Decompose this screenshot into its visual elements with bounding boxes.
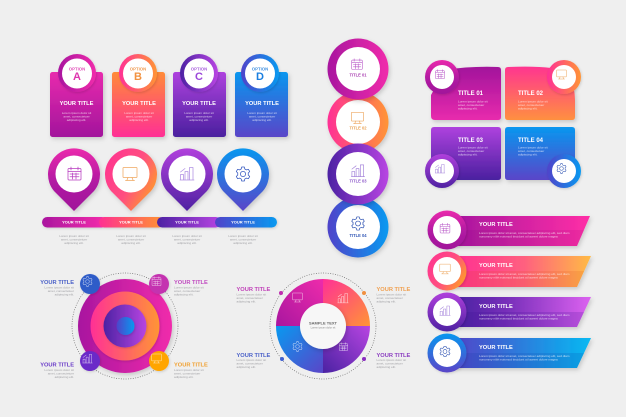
label top left: Lorem ipsum dolor sit xyxy=(44,286,74,290)
pin captions: amet, consectetuer xyxy=(118,238,144,242)
dotted ring xyxy=(72,273,178,379)
pin captions xyxy=(59,234,258,245)
pin captions: amet, consectetuer xyxy=(61,238,87,242)
label top right: YOUR TITLE xyxy=(376,287,411,293)
panel: option cards xyxy=(50,54,288,137)
pin B with monitor icon xyxy=(105,148,157,211)
option card D: amet, consectetuer xyxy=(249,114,275,118)
option card A: A xyxy=(73,71,81,83)
banner 3: YOUR TITLE xyxy=(479,304,513,310)
banner 1: nonummy nibh euismod tincidunt ut laoreet dolore magna xyxy=(479,234,558,238)
pin captions: Lorem ipsum dolor sit xyxy=(172,234,202,238)
option card B: B xyxy=(134,71,142,83)
label bottom right: YOUR TITLE xyxy=(174,362,208,368)
pin captions: adipiscing elit. xyxy=(177,241,197,245)
option card D: Lorem ipsum dolor sit xyxy=(247,111,277,115)
option card D xyxy=(235,54,288,137)
center label: SAMPLE TEXT xyxy=(309,320,338,326)
option card C: amet, consectetuer xyxy=(186,114,212,118)
label top right: amet, consectetuer xyxy=(174,289,200,293)
label top left: amet, consectetuer xyxy=(236,296,263,300)
title card 04 xyxy=(505,127,581,188)
panel: four title cards xyxy=(425,60,581,188)
banner 2 xyxy=(428,252,591,290)
title card 04: amet, consectetuer xyxy=(518,149,544,153)
label top right xyxy=(174,280,208,296)
label bottom left: Lorem ipsum dolor sit xyxy=(236,358,266,362)
title card 02: TITLE 02 xyxy=(518,91,544,97)
title card 02: adipiscing elit. xyxy=(518,106,538,110)
banner 2: nonummy nibh euismod tincidunt ut laoreet dolore magna xyxy=(479,276,558,280)
pin captions: amet, consectetuer xyxy=(230,238,256,242)
title card 02: amet, consectetuer xyxy=(518,103,544,107)
option card C xyxy=(173,54,226,137)
pin D with gear icon xyxy=(217,148,269,211)
label bottom right xyxy=(174,362,208,379)
title card 01: amet, consectetuer xyxy=(458,103,484,107)
label top right: amet, consectetuer xyxy=(376,296,403,300)
banner 4: YOUR TITLE xyxy=(479,345,513,351)
ring 04 xyxy=(328,196,388,258)
label bottom right: YOUR TITLE xyxy=(376,353,411,359)
panel: quadrant donut chart xyxy=(236,273,411,379)
label bottom left xyxy=(236,353,271,369)
title card 03 xyxy=(425,127,501,188)
ring 01: TITLE 01 xyxy=(349,72,367,78)
pin captions: Lorem ipsum dolor sit xyxy=(116,234,146,238)
title card 03: amet, consectetuer xyxy=(458,149,484,153)
label top right: adipiscing elit. xyxy=(174,292,194,296)
option card C: adipiscing elit. xyxy=(189,118,209,122)
banner 1: Lorem ipsum dolor sit amet, consectetuer adipiscing elit, sed diam xyxy=(479,231,570,235)
label top left: YOUR TITLE xyxy=(236,287,271,293)
label top left xyxy=(40,280,74,296)
label top left: Lorem ipsum dolor sit xyxy=(236,292,266,296)
title card 04: adipiscing elit. xyxy=(518,152,538,156)
option card D: YOUR TITLE xyxy=(245,101,279,107)
pin captions: Lorem ipsum dolor sit xyxy=(228,234,258,238)
label bottom right: amet, consectetuer xyxy=(376,362,403,366)
label bottom right xyxy=(376,353,411,369)
timeline bar: YOUR TITLE xyxy=(119,220,143,224)
panel: stacked ring column xyxy=(328,38,388,258)
title card 01 xyxy=(425,60,501,120)
option card B: adipiscing elit. xyxy=(129,118,149,122)
banner 1 xyxy=(428,210,590,250)
title card 01: TITLE 01 xyxy=(458,91,484,97)
option card A: Lorem ipsum dolor sit xyxy=(62,111,91,115)
option card C: OPTION xyxy=(191,66,207,72)
timeline bar: YOUR TITLE xyxy=(62,220,86,224)
label top left xyxy=(236,287,271,304)
option card C: Lorem ipsum dolor sit xyxy=(184,111,214,115)
option card B: Lorem ipsum dolor sit xyxy=(124,111,154,115)
label bottom right: adipiscing elit. xyxy=(376,365,396,369)
panel: map pins timeline xyxy=(42,148,277,245)
center label xyxy=(300,303,346,349)
ring 01 xyxy=(328,38,388,100)
panel: concentric circles chart xyxy=(40,273,208,379)
label bottom right: Lorem ipsum dolor sit xyxy=(174,368,204,372)
quadrant icon: calendar xyxy=(339,343,348,351)
title card 03: adipiscing elit. xyxy=(458,152,478,156)
option card A: YOUR TITLE xyxy=(60,101,94,107)
option card B: amet, consectetuer xyxy=(126,114,152,118)
pin captions: amet, consectetuer xyxy=(174,238,200,242)
ring 02 xyxy=(328,92,388,152)
label bottom left: Lorem ipsum dolor sit xyxy=(44,368,74,372)
label bottom left: YOUR TITLE xyxy=(236,353,271,359)
label bottom left: YOUR TITLE xyxy=(40,362,74,368)
label bottom left: amet, consectetuer xyxy=(48,372,74,376)
title card 03: Lorem ipsum dolor sit xyxy=(458,146,488,150)
banner 4 xyxy=(428,334,591,372)
ring 03 xyxy=(328,144,388,204)
title card 01: Lorem ipsum dolor sit xyxy=(458,100,488,104)
option card D: OPTION xyxy=(252,66,268,72)
quadrant icon: monitor xyxy=(293,293,302,302)
banner 4: nonummy nibh euismod tincidunt ut laoreet dolore magna xyxy=(479,358,558,362)
timeline bar: YOUR TITLE xyxy=(231,220,255,224)
label bottom right: adipiscing elit. xyxy=(174,375,194,379)
option card A: adipiscing elit. xyxy=(67,118,86,122)
banner 2: Lorem ipsum dolor sit amet, consectetuer adipiscing elit, sed diam xyxy=(479,272,570,276)
title card 02: Lorem ipsum dolor sit xyxy=(518,100,548,104)
banner 2: YOUR TITLE xyxy=(479,263,513,269)
quadrant icon: chart xyxy=(338,294,348,303)
pin A with calendar icon xyxy=(48,148,100,211)
label top left: adipiscing elit. xyxy=(236,300,256,304)
option card B xyxy=(112,54,165,137)
label top right: Lorem ipsum dolor sit xyxy=(174,286,204,290)
pin captions: adipiscing elit. xyxy=(64,241,84,245)
center label: Lorem ipsum dolor sit xyxy=(311,326,336,330)
ring 02: TITLE 02 xyxy=(349,126,367,130)
option card A: amet, consectetuer xyxy=(63,114,90,118)
timeline bar xyxy=(42,217,277,228)
node: calendar xyxy=(149,274,169,294)
option card C: C xyxy=(195,71,203,83)
label top left: adipiscing elit. xyxy=(55,292,74,296)
banner 3: nonummy nibh euismod tincidunt ut laoreet dolore magna xyxy=(479,316,558,320)
title card 04: Lorem ipsum dolor sit xyxy=(518,146,548,150)
label top right: Lorem ipsum dolor sit xyxy=(376,292,406,296)
banner 3: Lorem ipsum dolor sit amet, consectetuer adipiscing elit, sed diam xyxy=(479,313,570,317)
title card 02 xyxy=(505,60,581,120)
pin C with chart icon xyxy=(161,148,213,211)
label bottom left: adipiscing elit. xyxy=(55,375,74,379)
title card 03: TITLE 03 xyxy=(458,138,484,144)
label top right: adipiscing elit. xyxy=(376,300,396,304)
option card D: D xyxy=(256,71,264,83)
option card B: OPTION xyxy=(130,66,146,72)
quadrant icon: gear xyxy=(293,342,302,351)
label top right xyxy=(376,287,411,304)
pin captions: adipiscing elit. xyxy=(233,241,253,245)
quadrants xyxy=(276,279,370,373)
option card C: YOUR TITLE xyxy=(182,101,216,107)
title card 01: adipiscing elit. xyxy=(458,106,478,110)
banner 1: YOUR TITLE xyxy=(479,222,513,228)
title card 04: TITLE 04 xyxy=(518,138,544,144)
ring 03: TITLE 03 xyxy=(349,178,367,184)
marker dots xyxy=(279,291,366,361)
label top left: amet, consectetuer xyxy=(48,289,74,293)
pin captions: Lorem ipsum dolor sit xyxy=(59,234,89,238)
node: gear xyxy=(80,274,100,294)
option card A xyxy=(50,54,103,137)
concentric discs xyxy=(78,279,172,373)
ring 04: TITLE 04 xyxy=(349,233,367,238)
node: chart xyxy=(80,351,100,371)
option card D: adipiscing elit. xyxy=(252,118,272,122)
pin captions: adipiscing elit. xyxy=(121,241,141,245)
label bottom left: amet, consectetuer xyxy=(236,362,263,366)
option card B: YOUR TITLE xyxy=(122,101,156,107)
node: monitor xyxy=(149,351,169,371)
timeline bar: YOUR TITLE xyxy=(175,220,199,224)
option card A: OPTION xyxy=(69,66,85,72)
label top right: YOUR TITLE xyxy=(174,280,208,286)
label bottom right: amet, consectetuer xyxy=(174,372,200,376)
dotted ring xyxy=(270,273,376,379)
panel: banner list xyxy=(428,210,591,372)
label bottom left xyxy=(40,362,74,379)
banner 3 xyxy=(428,292,591,332)
label bottom left: adipiscing elit. xyxy=(236,365,256,369)
label bottom right: Lorem ipsum dolor sit xyxy=(376,358,406,362)
label top left: YOUR TITLE xyxy=(40,280,74,286)
banner 4: Lorem ipsum dolor sit amet, consectetuer adipiscing elit, sed diam xyxy=(479,354,570,358)
